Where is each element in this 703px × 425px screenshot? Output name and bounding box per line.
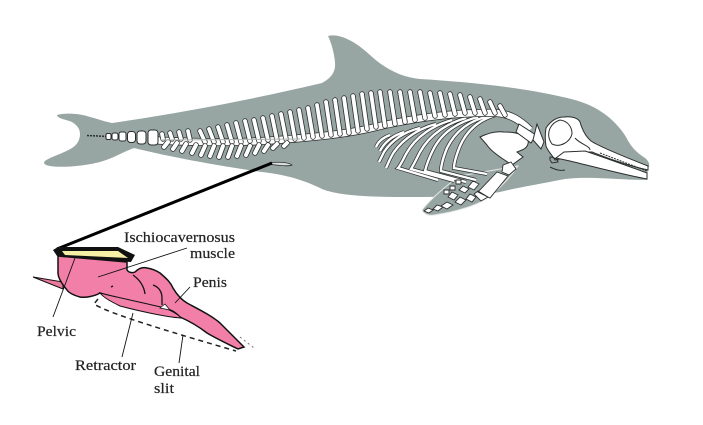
label: pelvic: Pelvic [37,324,76,340]
pelvic muscle tail [33,277,63,289]
cervical vertebrae [516,124,536,143]
label: genital: Genital [154,364,200,380]
genital slit dashes [94,299,236,351]
pink muscle body and penis [58,256,244,349]
white gap [160,304,170,310]
label: muscle: muscle [190,246,235,262]
label: penis: Penis [193,275,227,291]
inset: genital anatomy [33,230,254,397]
scapula [480,132,528,165]
skull details [549,120,590,170]
retractor muscle [100,293,181,318]
label: retractor: Retractor [75,358,136,374]
label: slit: slit [154,381,175,397]
pectoral flipper [422,166,518,215]
lower jaw [556,151,647,179]
pelvic bone [270,162,292,166]
dolphin body silhouette [44,35,649,197]
inner muscle contour lines [111,275,162,305]
spine column [150,113,530,142]
skeleton [57,92,648,249]
ischiocavernosus cap [53,247,135,262]
pointer line [57,163,272,249]
flipper bones [424,162,516,213]
tail vertebrae [87,136,108,137]
skull [545,117,648,170]
leader lines [53,248,190,363]
label: ischiocavernosus muscle: Ischiocavernosus [124,230,235,246]
